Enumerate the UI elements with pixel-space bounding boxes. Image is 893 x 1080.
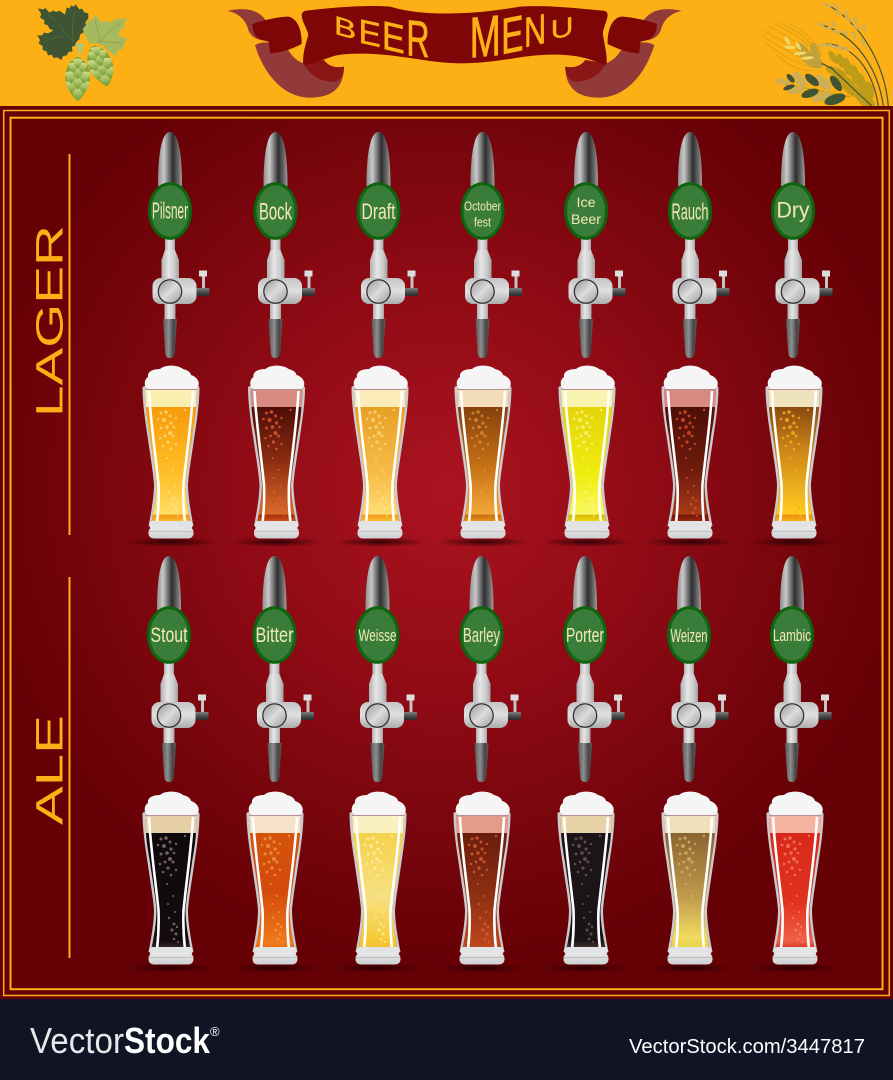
- glass: Draft beer: [334, 366, 426, 547]
- glass: Weizen beer: [644, 792, 736, 973]
- footer bar: [0, 999, 893, 1080]
- row: lager taps: [150, 132, 832, 358]
- title: BEER MENU: M: [470, 4, 501, 71]
- tap: Draft: Draft: [362, 199, 396, 224]
- tap: Ice Beer: Beer: [571, 211, 601, 227]
- icon: hop leaves and cones: [37, 4, 127, 101]
- section label: LAGER: LAGER: [29, 225, 71, 417]
- glass: Bitter beer: [229, 792, 321, 973]
- glass: Lambic beer: [749, 792, 841, 973]
- tap: Ice Beer: [566, 132, 626, 358]
- tap: Weizen: [668, 556, 728, 782]
- row: ale glasses: [125, 792, 841, 973]
- title: BEER MENU: U: [551, 12, 574, 46]
- banner ribbon with title: [227, 4, 682, 98]
- glass: Dry beer: [748, 366, 840, 547]
- tap: October fest: [462, 132, 522, 358]
- tap: October fest: fest: [474, 214, 491, 230]
- ribbon centre: [302, 6, 608, 65]
- glass: Bock beer: [230, 366, 322, 547]
- icon: wheat and barley: [762, 2, 888, 112]
- tap: Bock: Bock: [259, 198, 293, 226]
- title: BEER MENU: N: [524, 4, 546, 56]
- tap: Barley: Barley: [463, 625, 500, 647]
- glass: Pilsner beer: [125, 366, 217, 547]
- title: BEER MENU: E: [501, 5, 524, 66]
- row: ale taps: [148, 556, 832, 782]
- glass: October fest beer: [437, 366, 529, 547]
- title: BEER MENU: [334, 4, 574, 71]
- glass: Porter beer: [540, 792, 632, 973]
- tap: Bitter: Bitter: [256, 624, 294, 647]
- section label: ALE: ALE: [29, 715, 71, 825]
- title: BEER MENU: E: [382, 12, 405, 62]
- tap: Weizen: Weizen: [670, 626, 708, 646]
- title: BEER MENU: B: [334, 10, 356, 46]
- tap: Porter: Porter: [566, 625, 604, 647]
- row: lager glasses: [125, 366, 840, 547]
- glass: Weisse beer: [332, 792, 424, 973]
- tap: Lambic: [772, 556, 832, 782]
- glass: Ice Beer: [541, 366, 633, 547]
- tap: Barley: [461, 556, 521, 782]
- tap: Weisse: Weisse: [358, 626, 396, 645]
- glass: Barley beer: [436, 792, 528, 973]
- tap: Dry: [772, 132, 832, 358]
- title: BEER MENU: R: [406, 10, 429, 68]
- footer credit: image id: VectorStock.com/3447817: [629, 1036, 865, 1058]
- tap: Rauch: Rauch: [672, 198, 708, 224]
- title: BEER MENU: E: [359, 12, 381, 55]
- tap: October fest: October: [464, 198, 502, 214]
- tap: Stout: [148, 556, 208, 782]
- tap: Bock: [255, 132, 315, 358]
- tap: Weisse: [357, 556, 417, 782]
- tap: Dry: Dry: [776, 198, 810, 222]
- tap: Draft: [358, 132, 418, 358]
- tap: Porter: [564, 556, 624, 782]
- right ribbon tail: [565, 9, 682, 98]
- tap: Ice Beer: Ice: [576, 194, 596, 210]
- tap: Lambic: Lambic: [773, 626, 811, 645]
- glass: Stout beer: [125, 792, 217, 973]
- left ribbon tail: [227, 9, 344, 98]
- footer logo: VectorStock: ®: [210, 1024, 220, 1039]
- tap: Rauch: [670, 132, 730, 358]
- glass: Rauch beer: [644, 366, 736, 547]
- tap: Pilsner: Pilsner: [152, 198, 188, 224]
- header band: [0, 0, 893, 106]
- tap: Bitter: [254, 556, 314, 782]
- footer logo: VectorStock: VectorStock: [30, 1020, 222, 1061]
- tap: Pilsner: [150, 132, 210, 358]
- tap: Stout: Stout: [150, 624, 188, 647]
